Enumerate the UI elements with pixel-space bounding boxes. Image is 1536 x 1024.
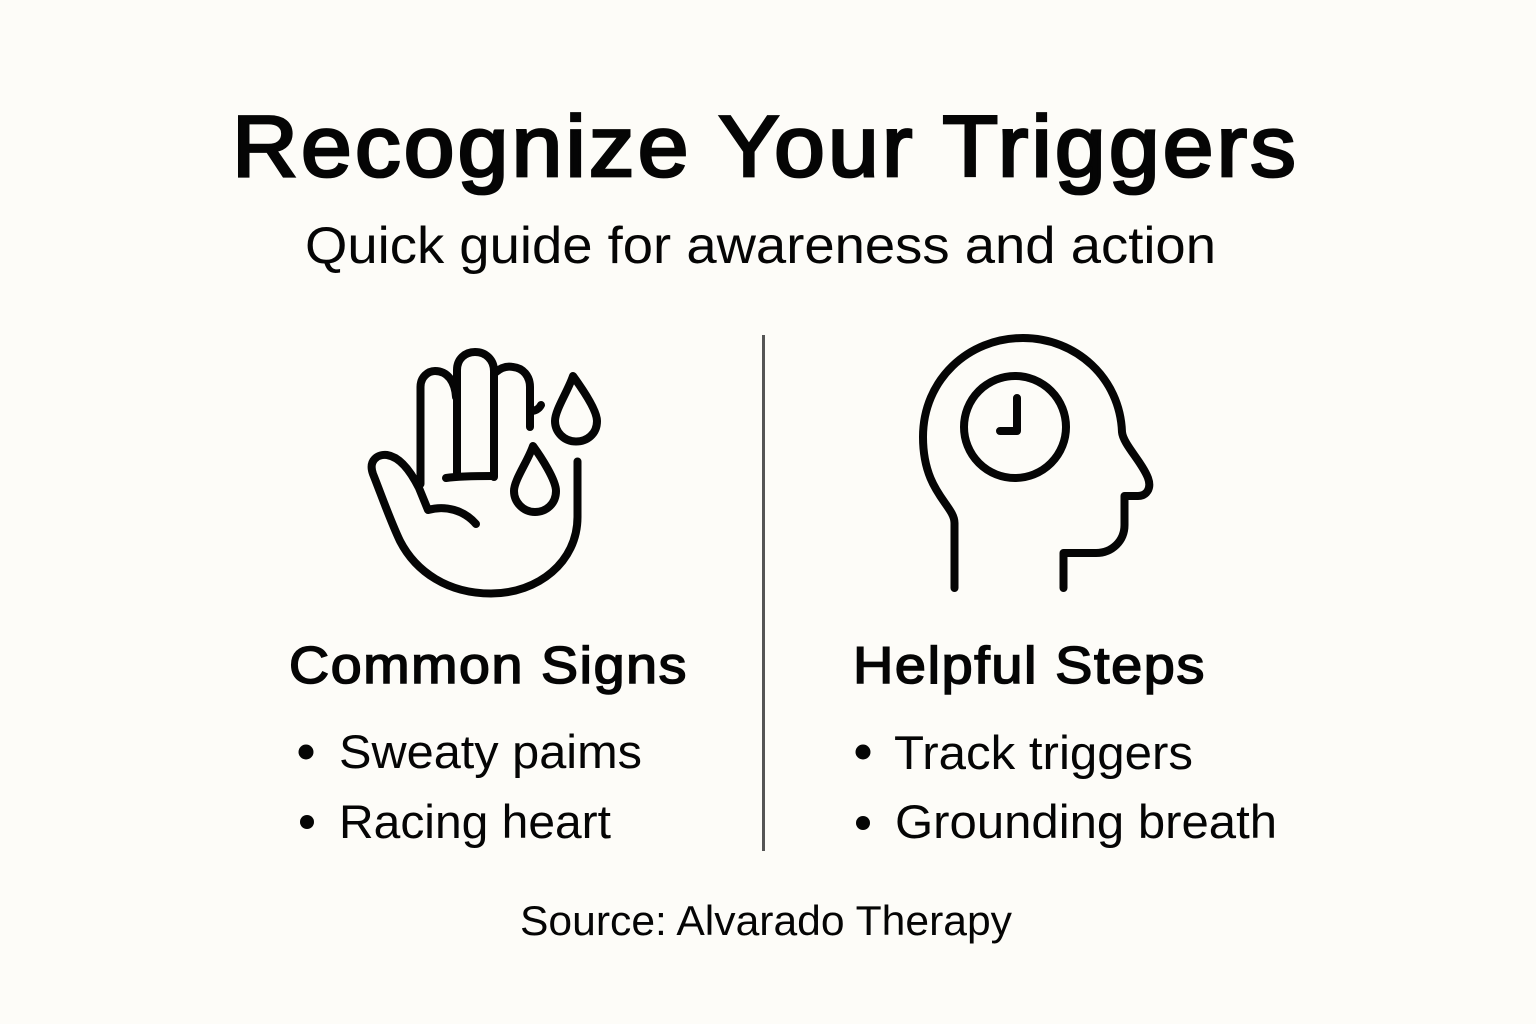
list: helpful steps: Grounding breath — [895, 795, 1277, 848]
list: helpful steps — [856, 726, 1277, 848]
list: helpful steps: Track triggers — [894, 726, 1193, 779]
icon: sweaty hand — [372, 352, 597, 594]
source note: Source: Alvarado Therapy — [520, 897, 1012, 944]
subtitle: Quick guide for awareness and action — [305, 217, 1216, 275]
icon: head with clock — [923, 338, 1149, 588]
list: common signs: Sweaty paims — [339, 725, 642, 778]
title: Recognize Your Triggers — [232, 99, 1299, 195]
panel: helpful steps — [853, 338, 1277, 848]
heading: helpful steps: Helpful Steps — [853, 637, 1206, 695]
heading: common signs: Common Signs — [289, 637, 688, 695]
list: common signs: Racing heart — [339, 795, 611, 848]
panel: common signs — [289, 352, 688, 848]
list: common signs — [298, 725, 642, 848]
center divider — [762, 335, 765, 851]
